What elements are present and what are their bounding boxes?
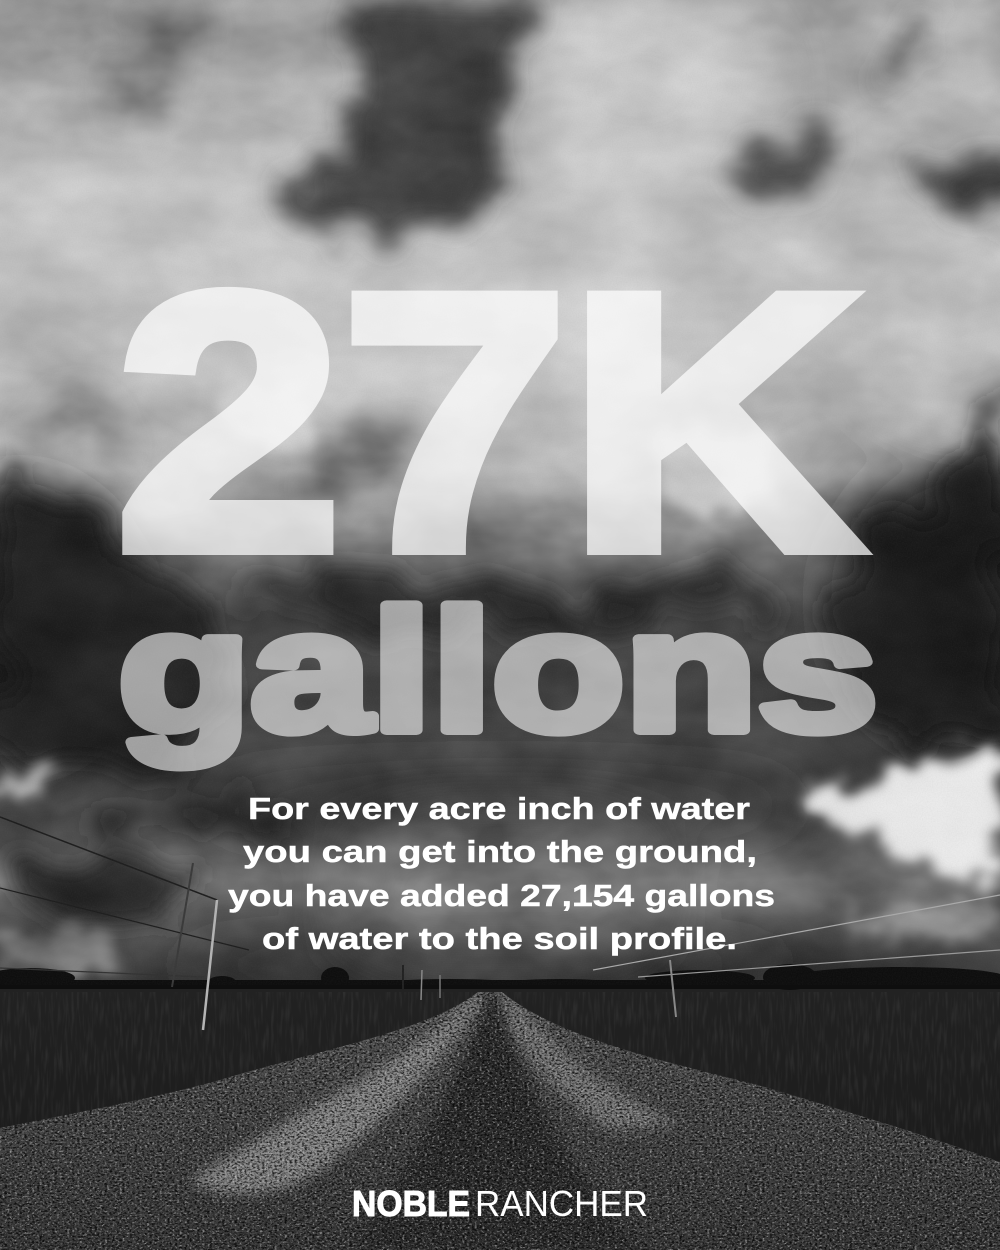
film grain [0,0,1000,985]
gravel road [0,990,1000,1250]
treeline on the horizon [0,964,1000,990]
supporting text [228,791,775,956]
bright cumulus clouds [0,380,1000,972]
road centre strip and wheel tracks [350,992,640,1250]
cloud texture [0,0,1000,985]
dark storm clouds [0,0,1000,930]
supporting text: you can get into the ground, [243,834,757,869]
logo: Noble Rancher: RANCHER [475,1183,648,1224]
fence posts and wires [0,817,1000,1030]
logo: Noble Rancher: NOBLE [352,1183,470,1224]
sky gradient [0,0,1000,1000]
supporting text: of water to the soil profile. [262,921,737,956]
supporting text: you have added 27,154 gallons [228,878,775,913]
supporting text: For every acre inch of water [248,791,750,826]
big word: gallons: gallons [118,575,878,767]
logo: Noble Rancher [352,1183,648,1224]
ground [0,982,1000,1250]
big number: 27K: 27K [116,219,861,626]
soft light and dark tonal areas [0,0,1000,983]
grass texture [0,992,1000,1167]
